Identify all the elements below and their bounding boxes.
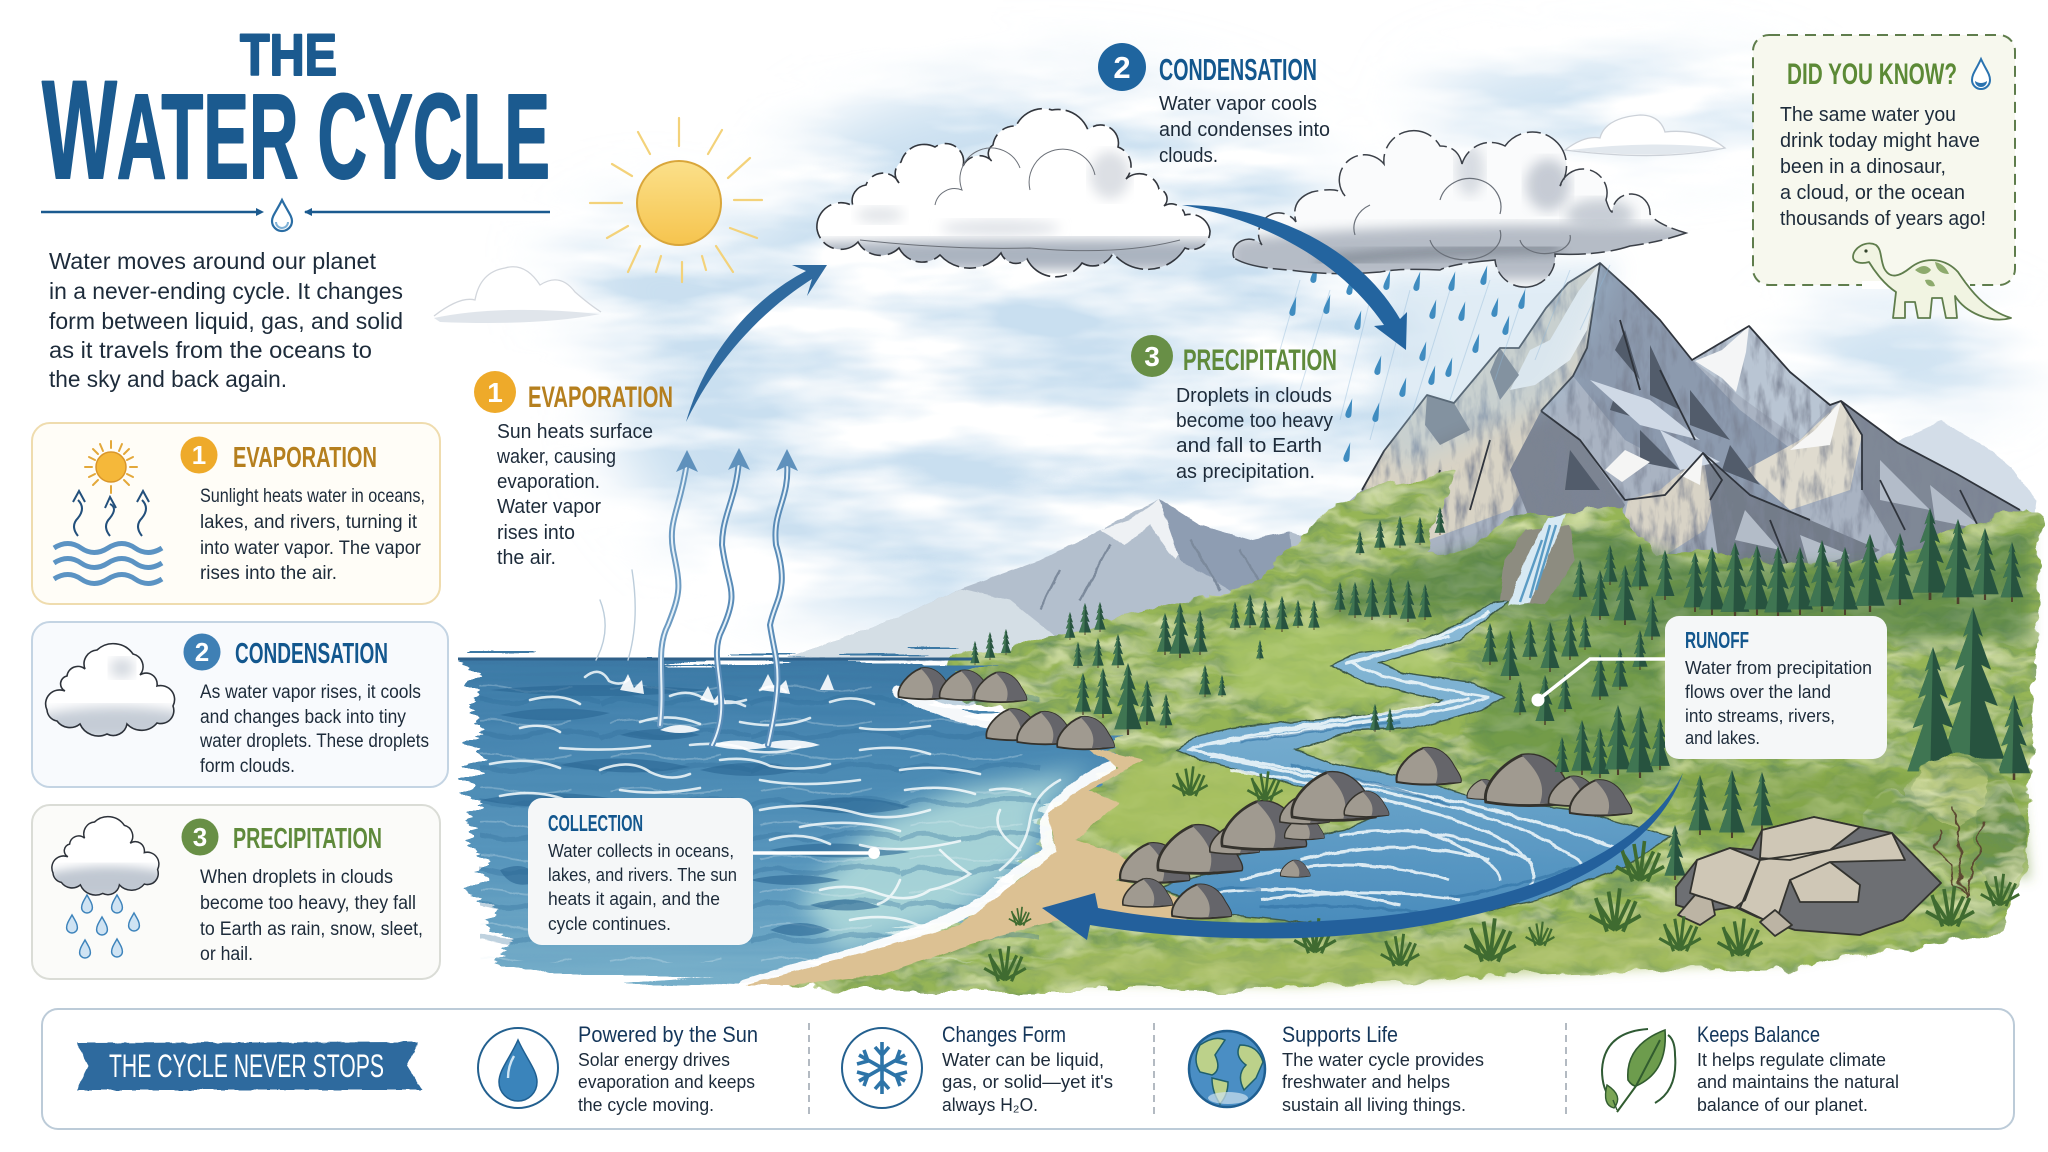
shrubs at right (1866, 753, 2026, 900)
feature: supports life: The water cycle provides (1282, 1050, 1484, 1070)
label: precipitation (1131, 335, 1337, 483)
feature: supports life: Supports Life (1282, 1022, 1398, 1047)
feature: powered by the sun: evaporation and keeps (578, 1072, 755, 1092)
waterfall streams (1520, 525, 1556, 602)
intro text: as it travels from the oceans to (49, 337, 372, 363)
body text (199, 682, 429, 777)
feature: changes form: always H₂O. (942, 1095, 1038, 1115)
banner: THE CYCLE NEVER STOPS (109, 1048, 384, 1084)
fun fact text: thousands of years ago! (1780, 208, 1986, 230)
title divider with drop (41, 200, 550, 231)
heading: condensation: CONDENSATION (235, 638, 388, 670)
feature: powered by the sun: the cycle moving. (578, 1095, 714, 1115)
panel: evaporation card (32, 423, 440, 604)
title: WATER CYCLE (42, 51, 550, 208)
large boulder (1676, 817, 1941, 936)
icon: cloud (40, 644, 180, 740)
label: condensation: 2 (1113, 50, 1131, 85)
fun fact text (1780, 104, 1986, 230)
intro text: form between liquid, gas, and solid (49, 308, 403, 334)
badge 1 (180, 436, 218, 474)
icon: sun (590, 118, 762, 282)
feature: powered by the sun (578, 1022, 758, 1115)
title (42, 23, 550, 208)
shallow water near shore (800, 770, 1090, 950)
feature: powered by the sun: Powered by the Sun (578, 1022, 758, 1047)
banner (76, 1042, 422, 1090)
body text: to Earth as rain, snow, sleet, (200, 919, 423, 940)
feature: changes form: Changes Form (942, 1022, 1066, 1047)
body text: form clouds. (200, 756, 295, 777)
beach sand (745, 745, 1223, 985)
fun fact text: drink today might have (1780, 130, 1980, 152)
faint cloud left (434, 267, 601, 323)
icon: snowflake in ring (842, 1028, 922, 1108)
horizon line (458, 658, 975, 660)
label: evaporation: Sun heats surface (497, 421, 653, 443)
land: green hills (790, 472, 2040, 990)
intro text (49, 248, 403, 392)
title: THE (240, 23, 337, 88)
feature: keeps balance: Keeps Balance (1697, 1022, 1820, 1047)
waterfall (1508, 514, 1566, 606)
body text: or hail. (200, 944, 253, 965)
badge 2: 2 (195, 637, 209, 667)
label: evaporation: the air. (497, 547, 556, 569)
feature: keeps balance (1697, 1022, 1899, 1115)
distant right mountain (1890, 421, 2036, 540)
badge 2 (184, 634, 220, 670)
body text: As water vapor rises, it cools (200, 682, 421, 703)
feature: keeps balance: and maintains the natural (1697, 1072, 1899, 1092)
rain cloud (1230, 131, 1690, 287)
far mountain range (787, 499, 1330, 662)
callout: collection: COLLECTION (548, 810, 643, 836)
intro text: in a never-ending cycle. It changes (49, 278, 403, 304)
callout: collection: heats it again, and the (548, 889, 720, 909)
body text (200, 486, 425, 584)
body text: Sunlight heats water in oceans, (200, 486, 425, 507)
label: condensation: clouds. (1159, 145, 1218, 167)
feature: supports life: sustain all living things. (1282, 1095, 1466, 1115)
heading: evaporation: EVAPORATION (233, 442, 377, 474)
feature: supports life: freshwater and helps (1282, 1072, 1450, 1092)
label: condensation: and condenses into (1159, 119, 1330, 141)
feature: changes form: Water can be liquid, (942, 1050, 1104, 1070)
label: precipitation: become too heavy (1176, 410, 1333, 432)
label: evaporation (474, 371, 673, 569)
river flow lines (1190, 612, 1620, 905)
icon: leaves (1602, 1029, 1675, 1112)
callout: runoff: and lakes. (1685, 728, 1760, 748)
fun fact text: The same water you (1780, 104, 1956, 126)
faint cloud top right (1565, 115, 1725, 156)
icon: sun over waves (54, 441, 162, 584)
callout: collection: lakes, and rivers. The sun (548, 865, 737, 885)
vapor arrows rising (596, 448, 798, 745)
arrow: condensation to precipitation (1182, 205, 1407, 350)
label: precipitation: and fall to Earth (1176, 435, 1322, 457)
condensation cloud (810, 109, 1215, 277)
body text: and changes back into tiny (200, 707, 406, 728)
callout: runoff: flows over the land (1685, 682, 1831, 702)
callout: runoff: into streams, rivers, (1685, 706, 1835, 726)
body text: into water vapor. The vapor (200, 538, 422, 559)
label: condensation: CONDENSATION (1159, 52, 1317, 87)
body text: When droplets in clouds (200, 867, 393, 888)
illustration: watercolor landscape (458, 60, 2040, 990)
fun fact text: been in a dinosaur, (1780, 156, 1946, 178)
label: precipitation: as precipitation. (1176, 461, 1315, 483)
label: condensation: Water vapor cools (1159, 93, 1317, 115)
label: evaporation: evaporation. (497, 471, 600, 493)
rocks along shore and river (898, 668, 1632, 918)
panel: the cycle never stops footer (42, 1009, 2014, 1129)
arrow: evaporation to condensation (686, 265, 827, 422)
feature: supports life (1282, 1022, 1484, 1115)
label: precipitation: Droplets in clouds (1176, 385, 1332, 407)
body text: become too heavy, they fall (200, 893, 416, 914)
label: evaporation: waker, causing (496, 446, 616, 468)
callout: collection: cycle continues. (548, 914, 671, 934)
label: evaporation: 1 (487, 377, 503, 408)
badge 3 (182, 818, 218, 856)
main mountain massif (1287, 263, 2027, 610)
sky wash (560, 60, 2020, 630)
grass tufts (984, 766, 2019, 981)
label: precipitation: 3 (1144, 341, 1160, 372)
icon: drop in ring (478, 1028, 558, 1108)
callout: runoff (1532, 616, 1887, 759)
heading: did you know: DID YOU KNOW? (1787, 58, 1957, 91)
icon: rain cloud (47, 817, 163, 958)
label: evaporation: rises into (497, 522, 575, 544)
callout: collection: Water collects in oceans, (548, 841, 734, 861)
wave pattern (480, 672, 1040, 962)
label: precipitation: PRECIPITATION (1183, 344, 1337, 377)
rain shower (1280, 253, 1620, 470)
conifer trees (970, 507, 2030, 880)
badge 3: 3 (193, 822, 207, 852)
feature: keeps balance: It helps regulate climate (1697, 1050, 1886, 1070)
shoreline foam (745, 692, 1110, 985)
heading: precipitation: PRECIPITATION (233, 823, 382, 855)
panel: precipitation card (32, 805, 440, 979)
body text (200, 867, 423, 965)
feature: keeps balance: balance of our planet. (1697, 1095, 1868, 1115)
body text: rises into the air. (200, 563, 337, 584)
body text: lakes, and rivers, turning it (200, 512, 418, 533)
dark wave troughs (480, 685, 910, 936)
feature: changes form: gas, or solid—yet it's (942, 1072, 1113, 1092)
label: evaporation: Water vapor (497, 496, 601, 518)
river with bends (1161, 600, 1670, 923)
vapor splash (620, 674, 834, 750)
rock around waterfall (1500, 525, 1575, 605)
callout: runoff: Water from precipitation (1685, 658, 1872, 678)
fun fact text: a cloud, or the ocean (1780, 182, 1965, 204)
badge 1: 1 (192, 440, 206, 470)
feature: powered by the sun: Solar energy drives (578, 1050, 730, 1070)
arrow: runoff back to ocean (1042, 773, 1683, 940)
callout: runoff: RUNOFF (1685, 627, 1749, 653)
intro text: the sky and back again. (49, 366, 287, 392)
label: evaporation: EVAPORATION (528, 381, 673, 414)
intro text: Water moves around our planet (49, 248, 377, 274)
callout: did you know (1753, 35, 2015, 285)
icon: dinosaur (1853, 243, 2011, 320)
callout: collection (528, 798, 880, 945)
panel: condensation card (32, 622, 448, 787)
body text: water droplets. These droplets (199, 731, 429, 752)
ocean (458, 659, 1113, 985)
hill shading (1000, 530, 2030, 985)
label: condensation (1098, 43, 1330, 167)
feature: changes form (942, 1022, 1113, 1115)
icon: globe (1189, 1031, 1265, 1107)
white wave crests (490, 672, 1060, 926)
icon: water drop (1972, 59, 1990, 89)
